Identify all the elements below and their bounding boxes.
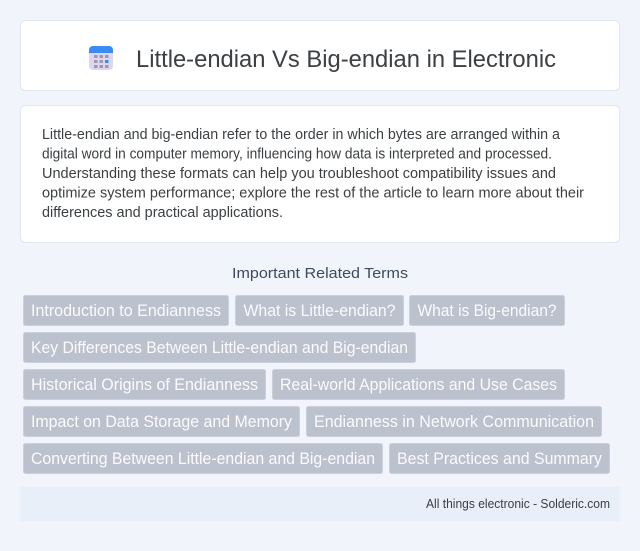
tag (306, 406, 602, 436)
intro paragraph: Little-endian and big-endian refer to the order in which bytes are arranged within a (42, 127, 560, 143)
panel: header card (20, 20, 620, 90)
tag (24, 296, 228, 326)
intro paragraph: optimize system performance; explore the rest of the article to learn more about their (42, 186, 584, 202)
tag (24, 406, 300, 436)
panel: intro text card (20, 106, 620, 242)
intro paragraph: digital word in computer memory, influencing how data is interpreted and processed. (42, 146, 552, 162)
tag: Introduction to Endianness (31, 301, 221, 320)
intro paragraph: differences and practical applications. (42, 205, 283, 221)
tag: Key Differences Between Little-endian and Big-endian (31, 338, 408, 357)
tag: What is Big-endian? (418, 301, 556, 320)
footer credit: All things electronic - Solderic.com (426, 497, 610, 511)
tag (410, 296, 564, 326)
tag: Converting Between Little-endian and Big-endian (31, 449, 375, 468)
tag: Endianness in Network Communication (314, 412, 594, 431)
tag (24, 370, 266, 400)
tag: Best Practices and Summary (397, 449, 603, 468)
tag (24, 332, 416, 362)
tag (24, 444, 382, 474)
footer bar (20, 487, 620, 521)
tag: What is Little-endian? (244, 301, 396, 320)
title: Little-endian Vs Big-endian in Electronic (136, 46, 556, 73)
intro paragraph: Understanding these formats can help you troubleshoot compatibility issues and (42, 166, 556, 182)
tag (236, 296, 404, 326)
tag (390, 444, 610, 474)
tag: Impact on Data Storage and Memory (31, 412, 293, 431)
heading: important related terms: Important Related Terms (232, 265, 408, 282)
panel: term tags (24, 296, 610, 474)
icon: calendar (89, 46, 113, 70)
tag: Historical Origins of Endianness (31, 375, 258, 394)
tag: Real-world Applications and Use Cases (280, 375, 557, 394)
tag (272, 370, 564, 400)
intro paragraph (42, 127, 584, 221)
